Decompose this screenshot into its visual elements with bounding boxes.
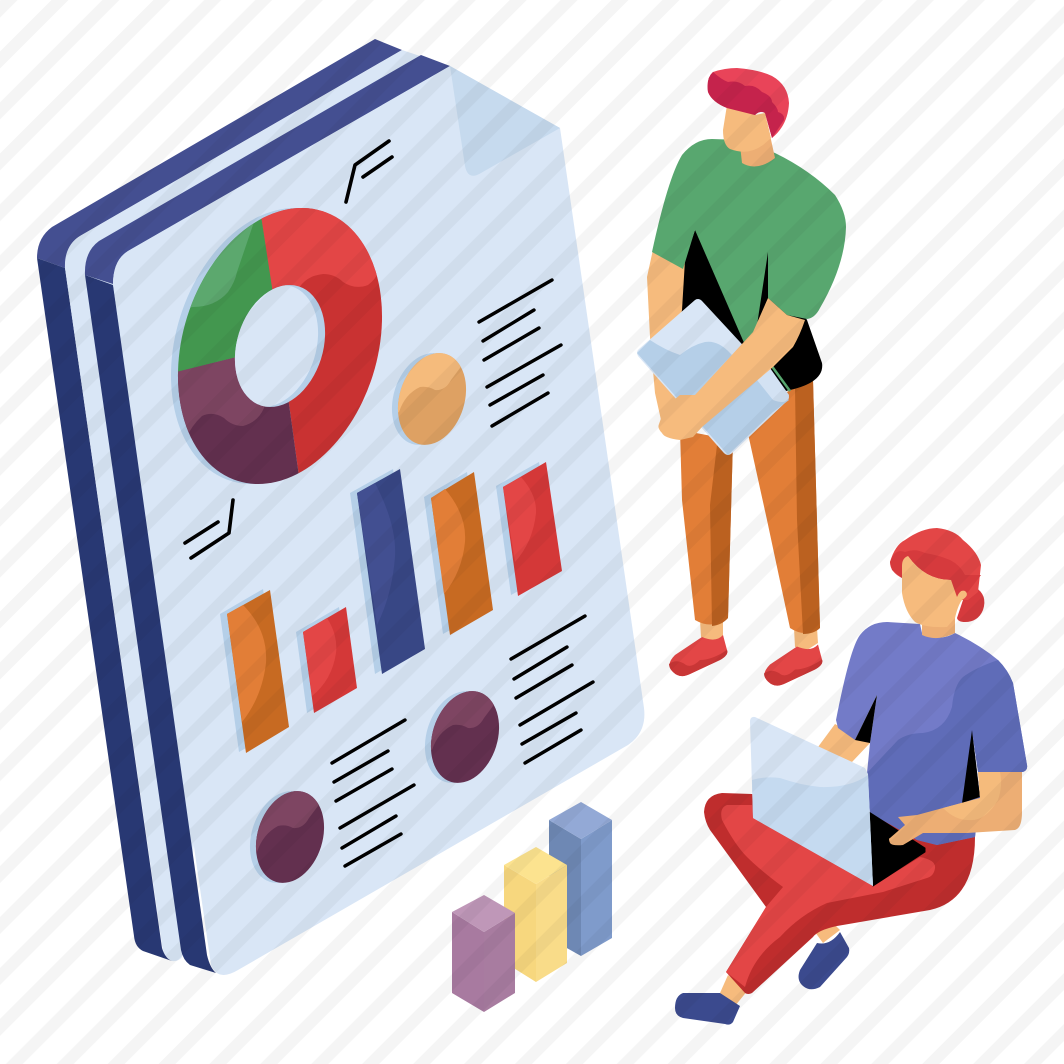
segment: red <box>261 208 382 474</box>
mark: bottom callout tick <box>185 500 233 558</box>
bar: orange 2 <box>424 472 493 635</box>
donut hole <box>234 285 326 407</box>
near ankle <box>720 975 748 1006</box>
3D blocks <box>452 802 612 1012</box>
block: purple <box>452 895 515 1012</box>
trousers <box>704 793 975 994</box>
panel: document stack <box>37 39 644 975</box>
page fold corner <box>450 66 560 176</box>
person: seated woman <box>675 528 1027 1025</box>
block: yellow <box>504 847 567 982</box>
hair bun <box>957 587 984 622</box>
neck <box>922 615 955 638</box>
undershirt shadow <box>680 230 822 400</box>
neck <box>740 135 775 167</box>
mark: top callout tick <box>346 141 392 202</box>
block: blue <box>549 802 612 956</box>
bar: red 2 <box>496 462 562 596</box>
near arm and hand <box>658 298 805 440</box>
segment: purple <box>178 358 298 484</box>
far shoe <box>799 920 849 989</box>
person: standing man <box>637 68 846 686</box>
laptop keyboard <box>869 812 925 886</box>
text lines: right block <box>511 616 593 763</box>
shoe: right <box>764 644 822 686</box>
back sheet <box>37 39 450 961</box>
front page <box>113 66 644 975</box>
far arm <box>818 724 870 762</box>
t-shirt <box>652 139 846 345</box>
left leg <box>680 430 733 626</box>
bar: red small <box>296 607 357 713</box>
bar: orange 1 <box>220 589 289 753</box>
ankles <box>700 620 818 650</box>
laptop screen <box>750 717 873 886</box>
t-shirt <box>836 622 1027 845</box>
purple circle left <box>250 791 324 883</box>
right leg <box>745 380 820 634</box>
far arm <box>647 245 690 420</box>
donut chart <box>171 208 382 484</box>
face <box>723 105 771 152</box>
purple circle right <box>425 691 500 783</box>
near shoe <box>675 993 740 1025</box>
bar: navy tall <box>350 469 425 674</box>
green sliver <box>771 365 790 391</box>
middle sheet <box>85 55 450 973</box>
text lines: upper block <box>479 280 561 426</box>
text lines: left block <box>332 720 414 866</box>
hair <box>890 528 981 600</box>
shoe: left <box>669 635 727 676</box>
near arm and hand <box>889 772 1022 845</box>
orange circle <box>392 353 466 445</box>
bar chart <box>220 462 562 753</box>
tablet <box>637 304 789 455</box>
hair <box>708 68 789 138</box>
segment: green <box>178 218 272 372</box>
face <box>902 556 967 627</box>
